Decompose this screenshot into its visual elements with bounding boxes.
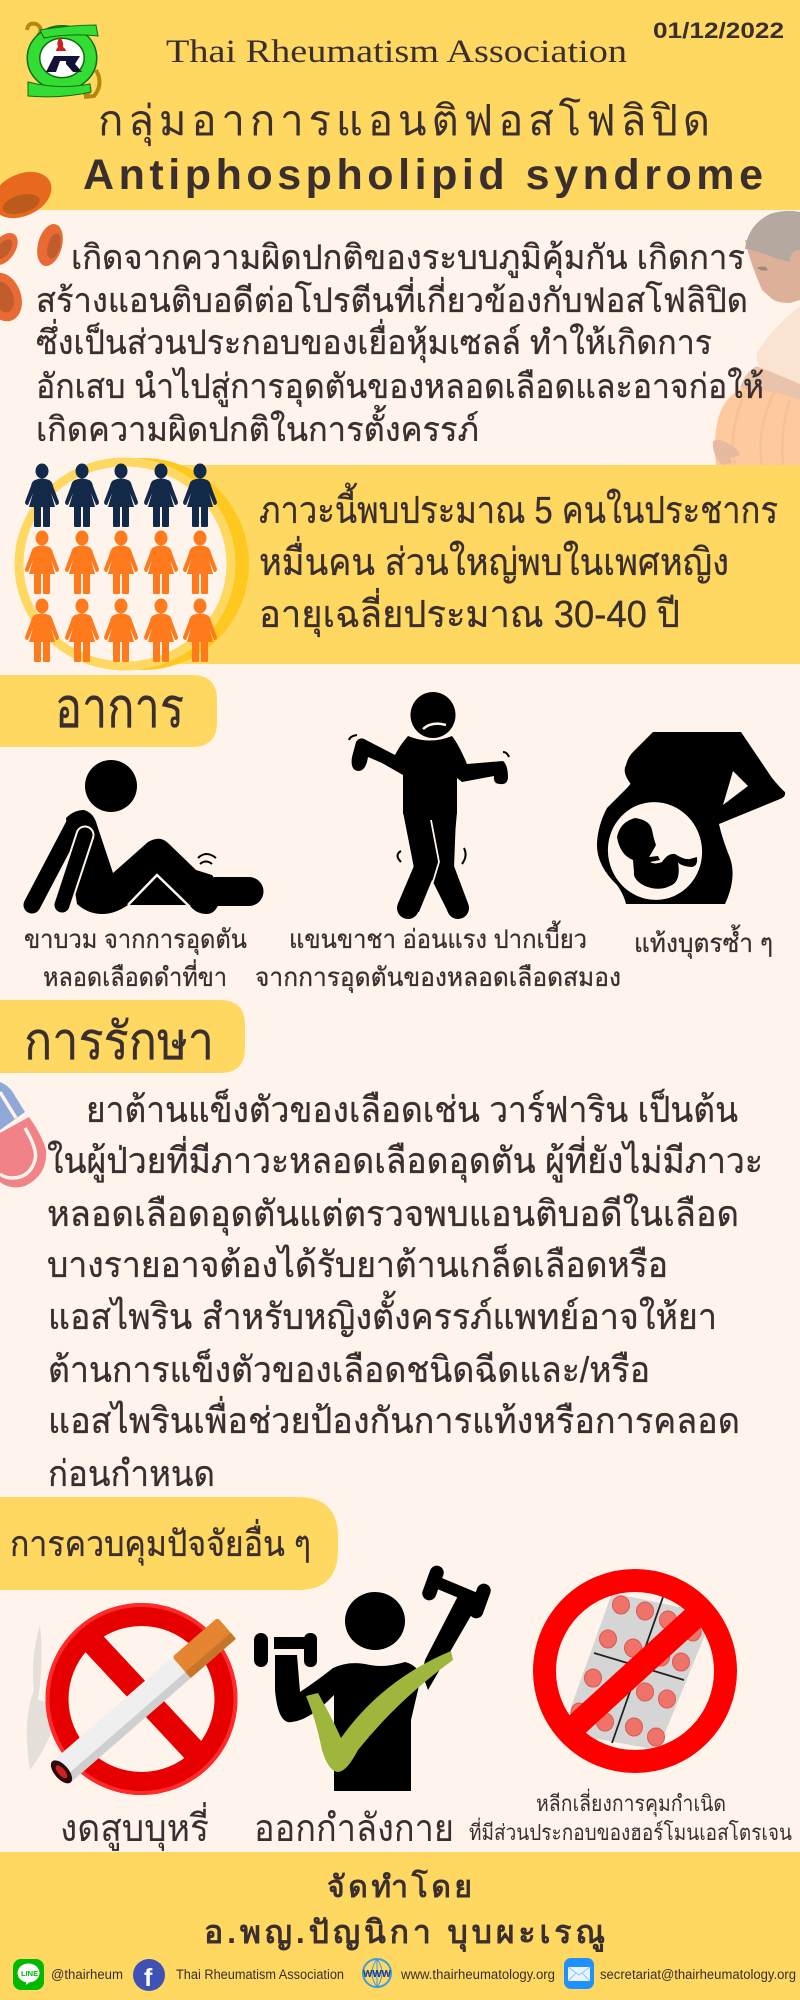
title: Thai: กลุ่มอาการแอนติฟอสโฟลิปิด — [98, 96, 710, 147]
illustration: pregnant woman — [713, 211, 800, 465]
heading pill: other risk factors — [0, 1497, 338, 1590]
contact: email address: secretariat@thairheumatology.org — [600, 1967, 796, 1982]
label: avoid estrogen contraceptives — [469, 1788, 792, 1845]
prevalence text — [259, 482, 778, 637]
heading pill: treatment: การรักษา — [24, 1013, 214, 1071]
heading pill: other risk factors: การควบคุมปัจจัยอื่น ๆ — [10, 1519, 311, 1566]
symptom labels — [24, 920, 773, 993]
symptom labels: แขนขาชา อ่อนแรง ปากเบี้ยว — [289, 920, 587, 954]
icon: Facebook — [133, 1959, 165, 1992]
icon: website globe: WWW — [363, 1969, 392, 1980]
prevalence circle — [19, 458, 249, 670]
treatment text block: ยาต้านแข็งตัวของเลือดเช่น วาร์ฟาริน เป็นต้น — [86, 1087, 738, 1130]
contact: Facebook name: Thai Rheumatism Association — [176, 1967, 344, 1982]
footer: prepared by: จัดทำโดย — [327, 1868, 472, 1904]
intro text block: เกิดความผิดปกติในการตั้งครรภ์ — [36, 405, 479, 449]
prevalence text: อายุเฉลี่ยประมาณ 30-40 ปี — [259, 588, 680, 637]
contact: website: www.thairheumatology.org — [400, 1967, 555, 1982]
date: 01/12/2022 — [653, 18, 784, 43]
heading pill: symptoms: อาการ — [55, 676, 184, 739]
symptom labels: ขาบวม จากการอุดตัน — [24, 924, 247, 955]
icon: Facebook: f — [144, 1964, 153, 1992]
treatment text block: แอสไพริน สำหรับหญิงตั้งครรภ์แพทย์อาจให้ยา — [48, 1290, 717, 1337]
pictogram: row of women, navy — [25, 464, 217, 527]
icon: person with weak limbs — [349, 692, 509, 912]
heading pill: treatment — [0, 1000, 245, 1073]
treatment text block: แอสไพรินเพื่อช่วยป้องกันการแท้งหรือการคลอด — [48, 1396, 740, 1441]
symptom labels: หลอดเลือดดำที่ขา — [43, 959, 227, 992]
icon: email — [564, 1958, 594, 1989]
icon: LINE: LINE — [21, 1969, 38, 1978]
treatment text block: ในผู้ป่วยที่มีภาวะหลอดเลือดอุดตัน ผู้ที่ยังไม่มีภาวะ — [47, 1136, 763, 1183]
header band — [0, 0, 800, 210]
icon: no birth control pills — [544, 1580, 726, 1762]
icon: pregnant belly with fetus — [597, 732, 785, 909]
treatment text block: ก่อนกำหนด — [48, 1453, 215, 1494]
title: English: Antiphospholipid syndrome — [83, 151, 763, 199]
heading pill: symptoms — [0, 675, 217, 747]
label: no smoking: งดสูบบุหรี่ — [60, 1802, 209, 1851]
logo: Thai Rheumatism Association — [27, 24, 100, 97]
intro text block: อักเสบ นำไปสู่การอุดตันของหลอดเลือดและอาจก่อให้ — [36, 367, 764, 407]
footer: author name: อ.พญ.ปัญนิกา บุบผะเรณู — [204, 1914, 605, 1953]
footer band — [0, 1852, 800, 2000]
symptom labels: แท้งบุตรซ้ำ ๆ — [634, 924, 773, 959]
label: avoid estrogen contraceptives: หลีกเลี่ยงการคุมกำเนิด — [536, 1788, 726, 1817]
treatment text block: หลอดเลือดอุดตันแต่ตรวจพบแอนติบอดีในเลือด — [47, 1193, 739, 1236]
intro text block: สร้างแอนติบอดีต่อโปรตีนที่เกี่ยวข้องกับฟอสโฟลิปิด — [36, 277, 748, 320]
organisation name: Thai Rheumatism Association — [166, 34, 627, 70]
symptom labels: จากการอุดตันของหลอดเลือดสมอง — [255, 962, 621, 993]
treatment text block — [47, 1087, 763, 1494]
pictogram: row of women, orange — [25, 598, 217, 662]
intro text block — [36, 239, 764, 449]
prevalence text: หมื่นคน ส่วนใหญ่พบในเพศหญิง — [259, 536, 729, 584]
icon: person with swollen leg — [32, 760, 264, 914]
intro text block: ซึ่งเป็นส่วนประกอบของเยื่อหุ้มเซลล์ ทำให้เกิดการ — [36, 319, 712, 363]
icon: exercise with check mark — [254, 1564, 493, 1791]
treatment text block: ต้านการแข็งตัวของเลือดชนิดฉีดและ/หรือ — [48, 1347, 650, 1390]
icon: LINE — [13, 1959, 44, 1990]
contact: LINE handle: @thairheum — [51, 1967, 123, 1982]
pictogram: row of women, orange — [25, 530, 217, 594]
intro text block: เกิดจากความผิดปกติของระบบภูมิคุ้มกัน เกิดการ — [71, 239, 745, 278]
label: exercise: ออกกำลังกาย — [254, 1808, 454, 1850]
icon: no smoking — [27, 1605, 236, 1793]
prevalence band — [180, 465, 800, 664]
treatment text block: บางรายอาจต้องได้รับยาต้านเกล็ดเลือดหรือ — [47, 1242, 668, 1285]
icon: capsule — [0, 1082, 46, 1187]
icon: website globe — [363, 1959, 392, 1987]
illustration: red blood cells — [0, 163, 67, 327]
